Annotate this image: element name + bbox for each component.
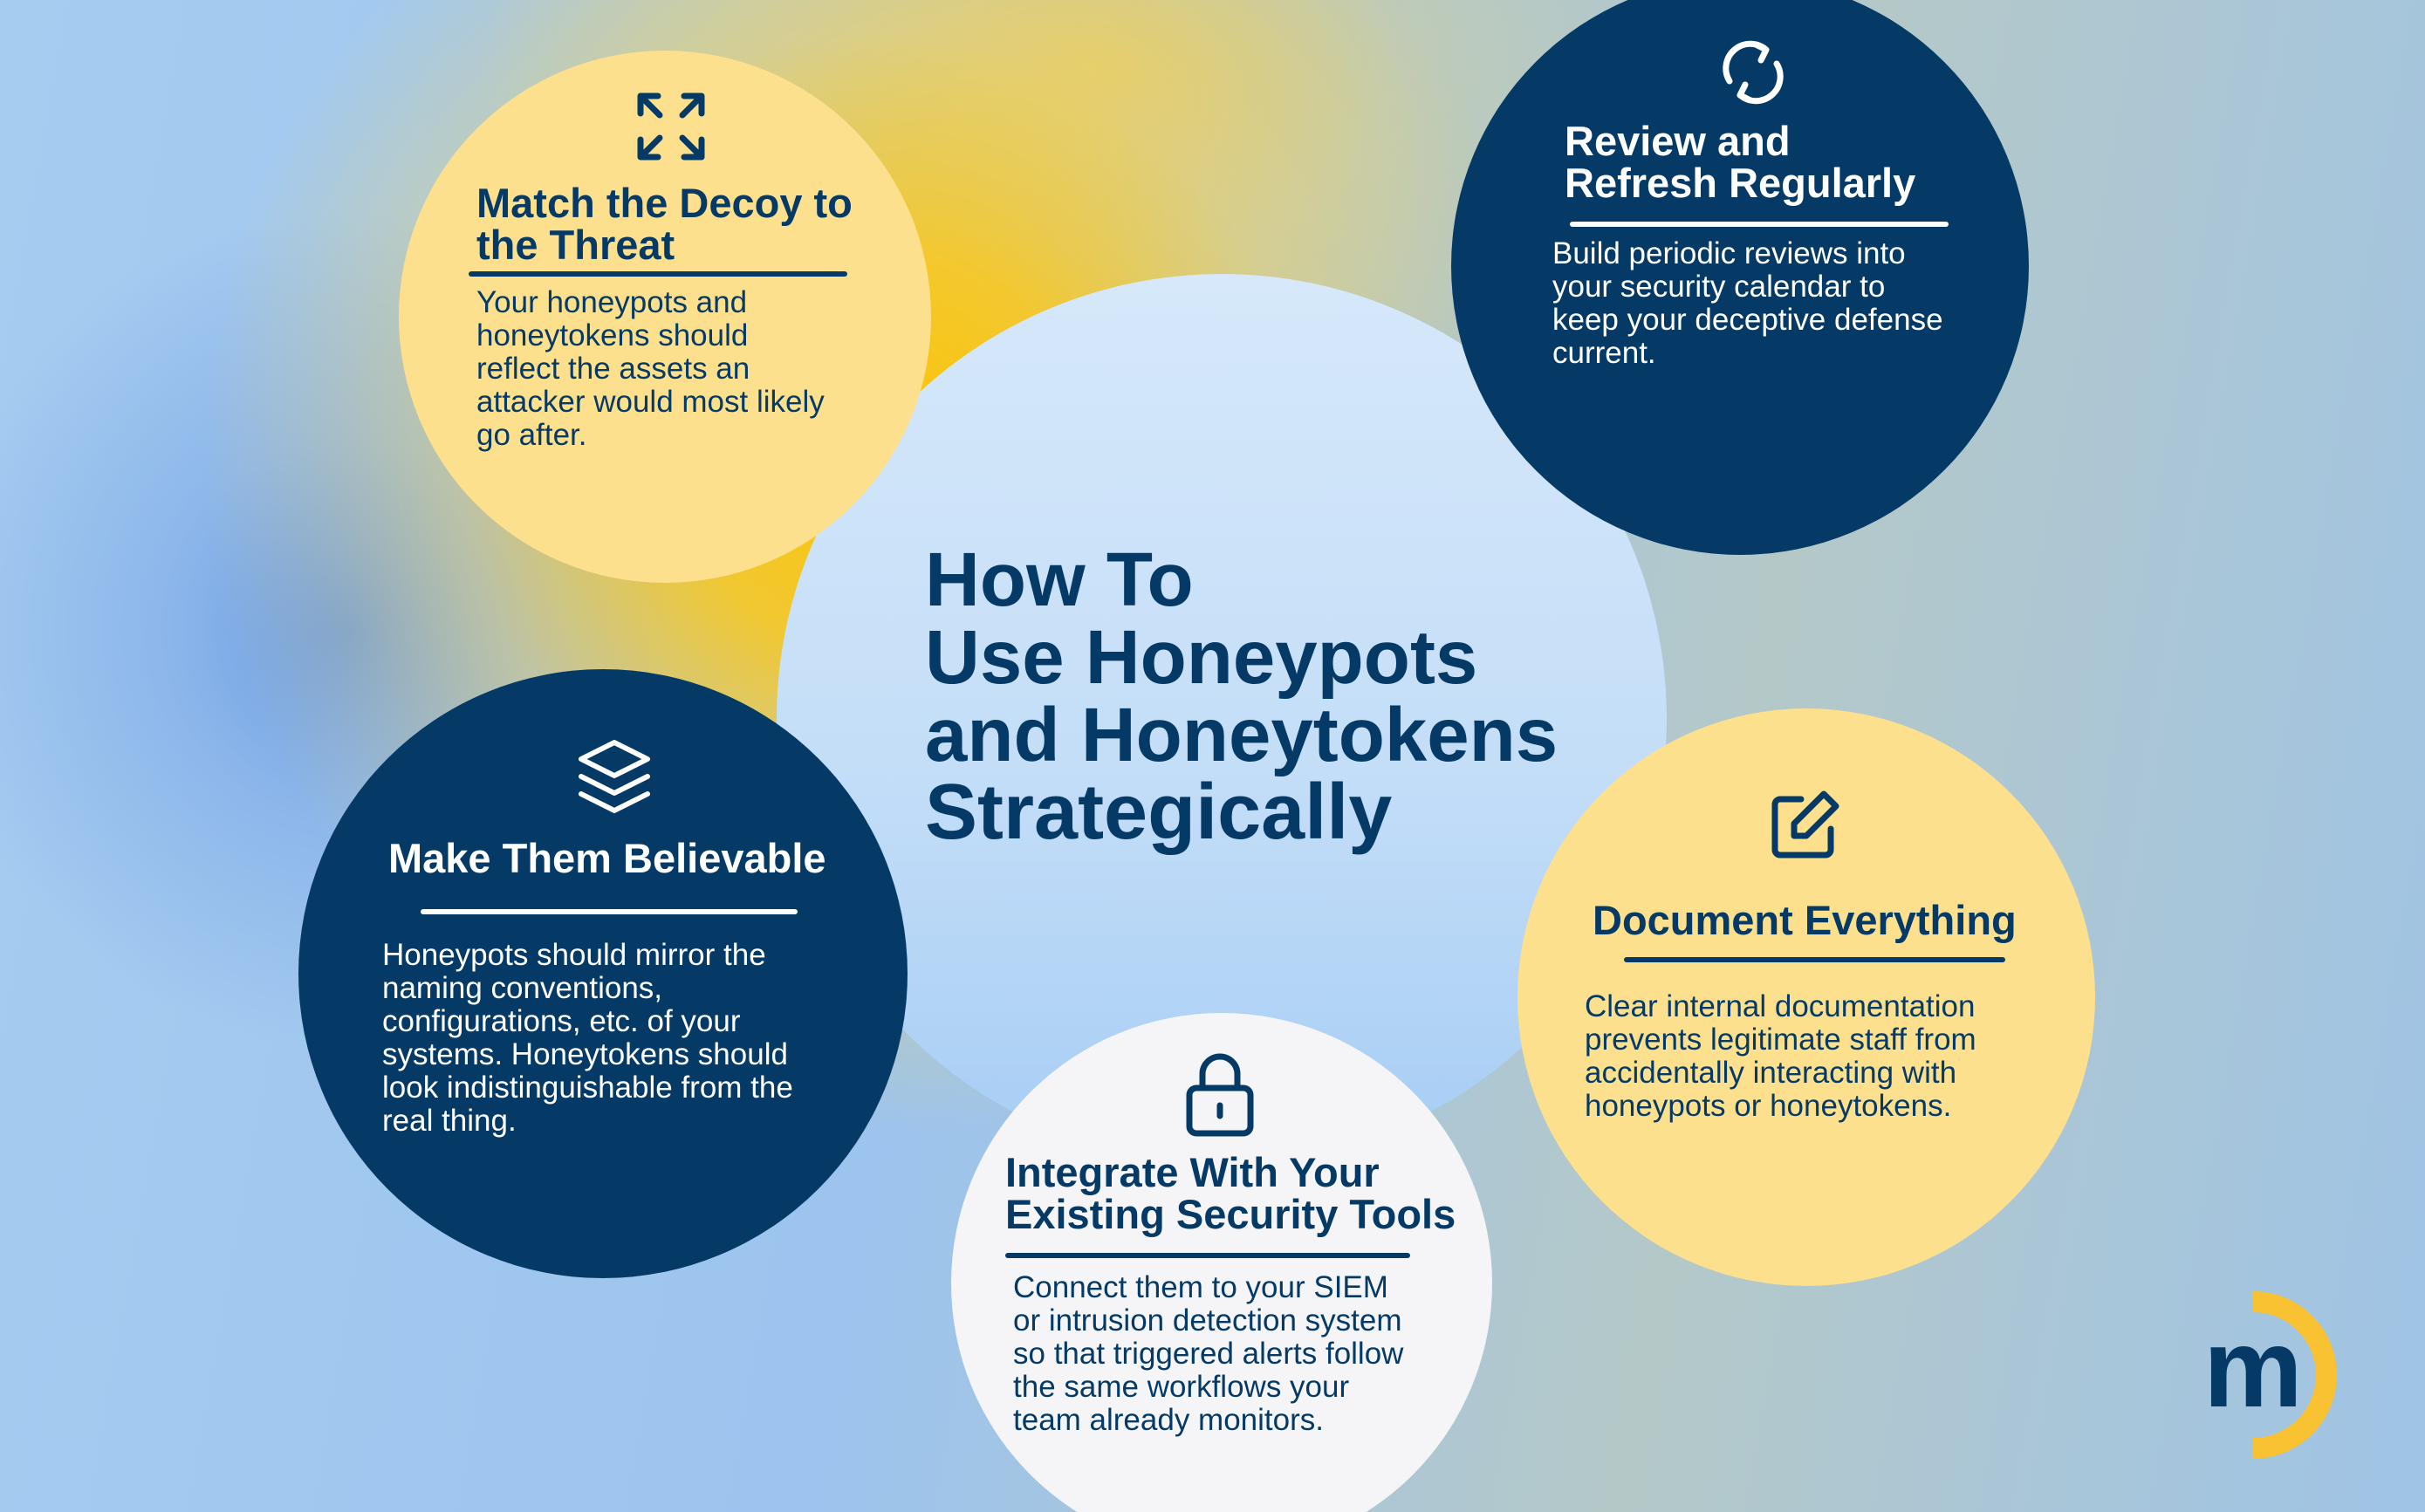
- heading: document: Document Everything: [1593, 897, 2017, 943]
- body: integrate: [1013, 1270, 1403, 1437]
- panel: document: [1517, 708, 2095, 1286]
- panel: believable: [298, 669, 908, 1278]
- body: document: [1585, 989, 1976, 1123]
- title: and Honeytokens: [925, 693, 1558, 777]
- body: integrate: the same workflows your: [1013, 1370, 1349, 1404]
- body: review: [1552, 236, 1943, 370]
- logo: m: [2203, 1306, 2303, 1431]
- body: review: keep your deceptive defense: [1552, 303, 1943, 337]
- icon: layers: [579, 740, 650, 813]
- body: match: go after.: [476, 418, 586, 452]
- body: match: Your honeypots and: [476, 285, 747, 319]
- body: match: attacker would most likely: [476, 385, 825, 419]
- icon: edit: [1771, 790, 1839, 859]
- heading: believable: Make Them Believable: [388, 835, 826, 881]
- heading: review: Refresh Regularly: [1565, 160, 1915, 206]
- heading: integrate: [1005, 1149, 1456, 1237]
- body: believable: real thing.: [382, 1104, 517, 1138]
- body: believable: look indistinguishable from the: [382, 1071, 793, 1105]
- heading: match: [476, 180, 853, 268]
- body: integrate: or intrusion detection system: [1013, 1303, 1401, 1338]
- body: document: accidentally interacting with: [1585, 1056, 1956, 1090]
- body: believable: naming conventions,: [382, 971, 662, 1005]
- heading: match: the Threat: [476, 222, 675, 268]
- body: document: prevents legitimate staff from: [1585, 1023, 1976, 1057]
- title: Use Honeypots: [925, 615, 1477, 700]
- body: match: honeytokens should: [476, 318, 748, 352]
- panel: review: [1451, 0, 2029, 555]
- icon: lock: [1187, 1054, 1253, 1136]
- title: How To: [925, 537, 1194, 622]
- title: [925, 537, 1558, 856]
- icon: expand arrows: [637, 92, 705, 161]
- body: integrate: so that triggered alerts follow: [1013, 1337, 1403, 1371]
- panel: integrate: [951, 1013, 1492, 1512]
- body: integrate: Connect them to your SIEM: [1013, 1270, 1388, 1304]
- body: document: honeypots or honeytokens.: [1585, 1089, 1951, 1123]
- body: match: reflect the assets an: [476, 352, 750, 386]
- heading: review: Review and: [1565, 118, 1791, 164]
- heading: match: Match the Decoy to: [476, 180, 853, 226]
- body: match: [476, 285, 825, 452]
- body: believable: Honeypots should mirror the: [382, 938, 766, 972]
- body: review: current.: [1552, 336, 1656, 370]
- body: believable: [382, 938, 793, 1138]
- body: believable: configurations, etc. of your: [382, 1004, 740, 1038]
- body: review: Build periodic reviews into: [1552, 236, 1906, 270]
- logo: [2203, 1291, 2337, 1459]
- body: document: Clear internal documentation: [1585, 989, 1975, 1023]
- heading: integrate: Integrate With Your: [1005, 1149, 1380, 1195]
- body: review: your security calendar to: [1552, 270, 1885, 304]
- title: Strategically: [925, 769, 1392, 856]
- heading: integrate: Existing Security Tools: [1005, 1191, 1456, 1237]
- heading: review: [1565, 118, 1915, 206]
- panel: match the decoy: [399, 51, 931, 583]
- body: integrate: team already monitors.: [1013, 1403, 1324, 1437]
- central circle: [777, 274, 1667, 1164]
- body: believable: systems. Honeytokens should: [382, 1037, 788, 1071]
- icon: refresh: [1723, 40, 1784, 105]
